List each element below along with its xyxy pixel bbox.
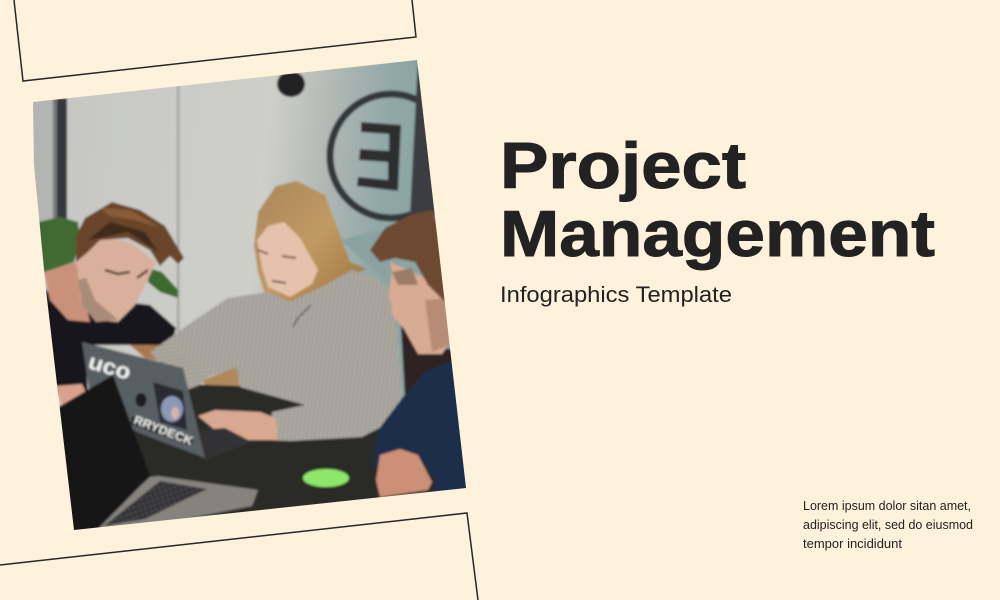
E logo on glass [325, 89, 418, 223]
dark background behind him [400, 325, 452, 396]
eye and jaw shading [392, 268, 450, 352]
woman in sweater [150, 181, 402, 441]
body text: tempor incididunt [803, 537, 903, 551]
woman's hand [198, 410, 278, 440]
silver base [92, 476, 258, 532]
face [389, 262, 452, 354]
black laptop [50, 375, 258, 535]
face [257, 222, 318, 297]
title [500, 129, 935, 270]
office wall [44, 60, 450, 408]
beard shadow [78, 278, 118, 322]
blonde hair [254, 181, 367, 305]
navy jacket [372, 360, 466, 492]
body text: adipiscing elit, sed do eiusmod [803, 518, 973, 532]
dark table [131, 383, 437, 519]
sticker: deck: RRYDECK [132, 413, 195, 448]
body text: Lorem ipsum dolor sitan amet, [803, 499, 971, 513]
screen [50, 375, 150, 535]
sleeve cuff [152, 354, 206, 390]
apple logo [136, 393, 146, 407]
brown hair [76, 202, 184, 266]
black shirt [40, 285, 176, 395]
title: Project [500, 129, 746, 202]
dark window frame [409, 60, 435, 216]
teal strip behind the right man [342, 233, 373, 264]
photo: team around laptops [25, 50, 475, 540]
man's hands [57, 382, 87, 406]
neck [44, 262, 90, 322]
face [76, 236, 156, 322]
title: Management [500, 197, 935, 270]
subtitle: Infographics Template [500, 282, 732, 307]
grey sweater [150, 270, 402, 441]
wall seam and dark post [28, 84, 180, 344]
sticker: gorilla [153, 382, 187, 430]
bottom frame outline [0, 513, 478, 600]
black ceiling dot [277, 71, 305, 97]
sticker: uco: uco [86, 349, 134, 384]
man at left [40, 202, 184, 395]
brown hair [370, 210, 448, 305]
man at right [370, 210, 475, 497]
grey laptop [82, 342, 252, 460]
body text [803, 499, 973, 551]
arm behind the laptop [130, 343, 160, 362]
hand [376, 449, 432, 497]
eyes and brows [105, 270, 148, 278]
keyboard [104, 481, 207, 526]
tan gap between sleeve and body [203, 366, 241, 389]
top frame outline [14, 0, 416, 81]
eyes [258, 250, 296, 283]
plant [38, 217, 178, 298]
necklace [293, 305, 311, 327]
green table dot [303, 469, 349, 487]
